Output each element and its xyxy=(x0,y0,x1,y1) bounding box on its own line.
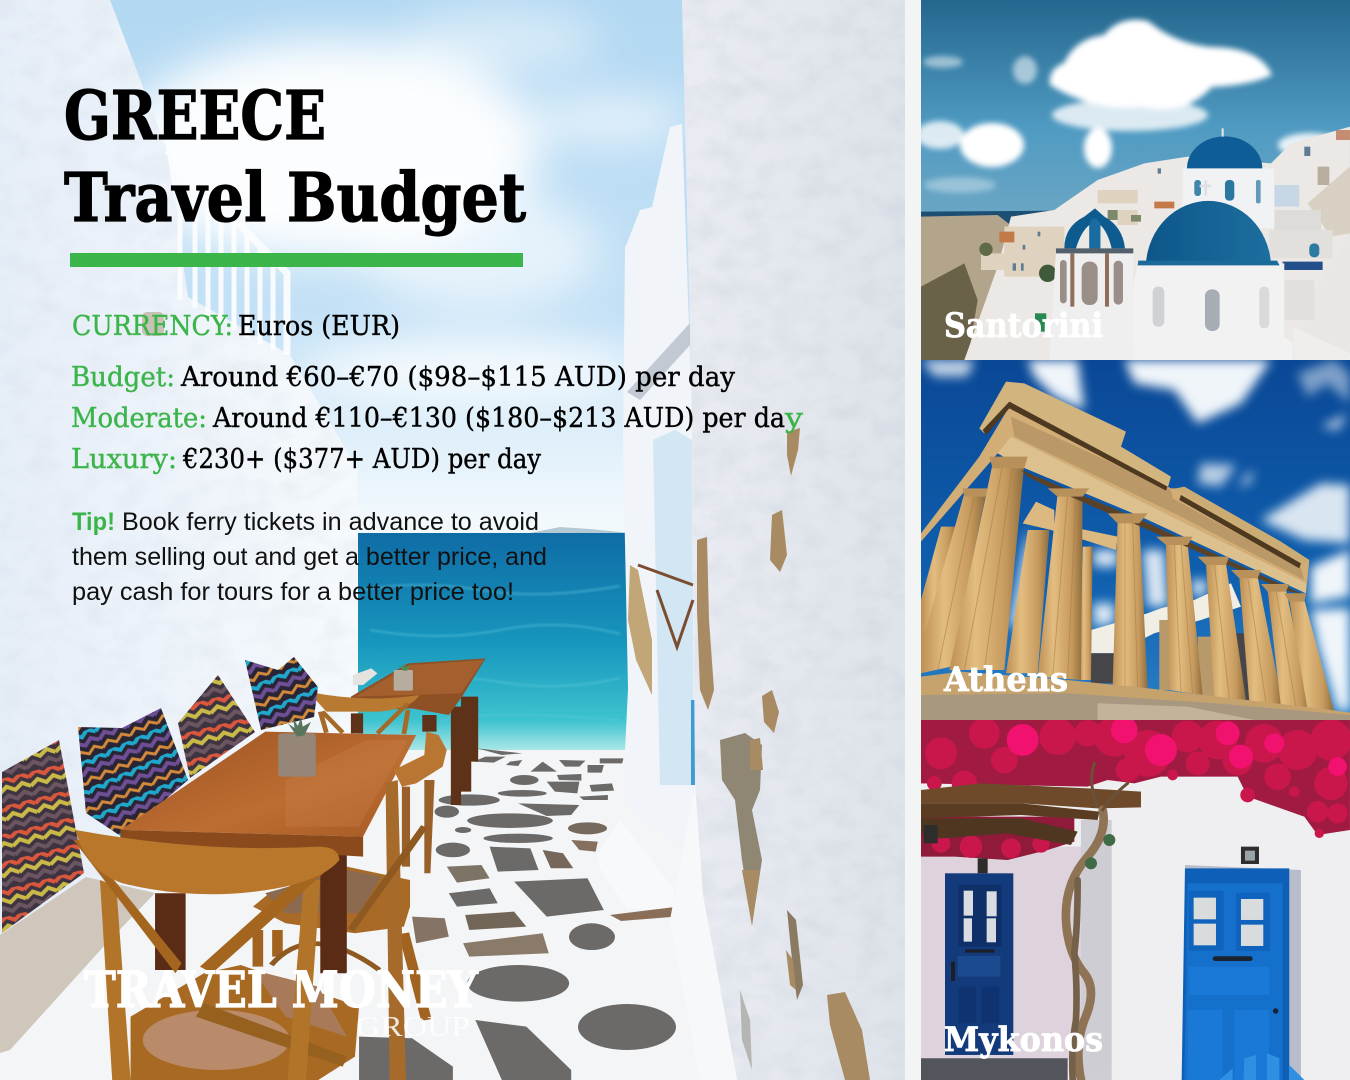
label: Santorini: Santorini xyxy=(944,306,1103,346)
steps and rock xyxy=(921,672,1350,720)
right lamp xyxy=(1241,847,1259,864)
budget line: Around €60–€70 ($98–$115 AUD) per day xyxy=(180,361,735,393)
sea and hillside xyxy=(921,210,1050,224)
currency line: Euros (EUR) xyxy=(238,310,400,342)
shaded alcove xyxy=(921,846,1081,1060)
tip text xyxy=(72,508,547,606)
tip text: Book ferry tickets in advance to avoid xyxy=(122,508,539,536)
title: Travel Budget xyxy=(64,158,526,237)
flutes xyxy=(938,465,1296,707)
currency line xyxy=(72,310,400,342)
stones by the step xyxy=(569,924,676,1050)
back church xyxy=(1183,168,1274,228)
moderate line: y xyxy=(784,402,804,434)
logo: Travel Money Group: GROUP xyxy=(356,1011,470,1043)
ground xyxy=(921,1058,1068,1080)
back ruins xyxy=(1091,583,1241,653)
paving stones xyxy=(359,748,623,1080)
sea xyxy=(358,533,628,750)
label: Athens: Athens xyxy=(943,660,1068,700)
panel: Athens photo xyxy=(921,360,1350,720)
tip text: pay cash for tours for a better price too! xyxy=(72,578,514,606)
right hillside and terraces xyxy=(1308,167,1350,237)
title: GREECE xyxy=(64,76,326,155)
vine leaves xyxy=(1103,834,1115,846)
flower canopy xyxy=(921,720,1350,835)
right door xyxy=(1185,865,1301,1080)
left lamps xyxy=(924,825,938,843)
wall lamp xyxy=(142,312,164,336)
logo: Travel Money Group: TRAVEL MONEY xyxy=(84,960,479,1019)
pillows xyxy=(2,657,318,933)
panel: main photo of whitewashed alley xyxy=(0,0,905,1080)
panel: Santorini photo xyxy=(916,0,1350,360)
pergola beams xyxy=(921,783,1141,808)
entablature xyxy=(921,407,1309,593)
luxury line xyxy=(71,443,541,475)
front chair xyxy=(73,830,359,1080)
budget line: Budget: xyxy=(71,361,175,393)
peeling plaster patches xyxy=(628,428,870,1080)
ground xyxy=(122,750,625,928)
village xyxy=(964,127,1350,360)
bell tower xyxy=(1064,208,1125,248)
right chair and table xyxy=(120,717,447,1080)
left wall xyxy=(0,0,358,1000)
bench cushion xyxy=(0,877,155,1053)
tip text: Tip! xyxy=(72,508,115,536)
pillar and niche xyxy=(623,124,692,750)
tip text: them selling out and get a better price, and xyxy=(72,543,547,571)
right wall xyxy=(682,0,905,1080)
label: Mykonos: Mykonos xyxy=(944,1020,1103,1060)
panel: Mykonos photo xyxy=(921,717,1350,1080)
front church xyxy=(1131,263,1293,360)
blue chair tops xyxy=(1219,1053,1304,1080)
green title rule xyxy=(70,253,523,267)
stone step by pillar xyxy=(598,820,675,909)
left door xyxy=(945,873,1013,1055)
clouds xyxy=(921,360,1350,710)
currency line: CURRENCY: xyxy=(72,310,233,342)
balustrade xyxy=(167,150,287,355)
far table and chair xyxy=(308,658,486,805)
rusty chain xyxy=(638,565,693,647)
vine trunk xyxy=(1066,763,1128,1080)
moderate line: Around €110–€130 ($180–$213 AUD) per da xyxy=(212,402,785,434)
moderate line: Moderate: xyxy=(71,402,207,434)
luxury line: €230+ ($377+ AUD) per day xyxy=(182,443,541,475)
column capitals xyxy=(963,457,1306,602)
columns xyxy=(921,463,1334,712)
luxury line: Luxury: xyxy=(71,443,177,475)
title xyxy=(64,76,526,237)
logo: Travel Money Group xyxy=(84,960,479,1043)
